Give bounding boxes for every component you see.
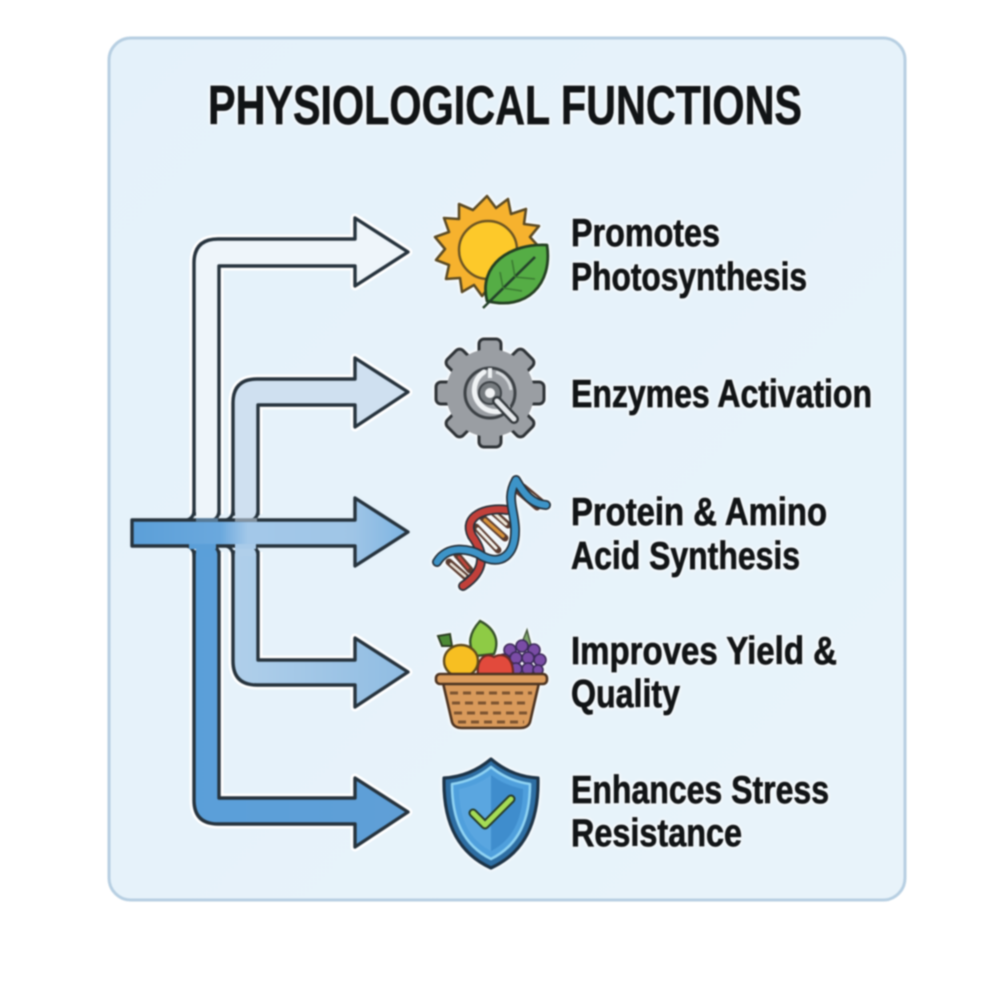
- title: PHYSIOLOGICAL FUNCTIONS: [208, 74, 802, 136]
- arrow: to stress resistance: [187, 544, 408, 847]
- icon: sun with leaf: [435, 196, 548, 308]
- panel: physiological functions background: [109, 38, 905, 900]
- label: protein and amino acid synthesis: Protein & Amino: [571, 491, 827, 534]
- label: improves yield and quality: Quality: [571, 673, 680, 716]
- icon: fruit basket: [436, 621, 547, 728]
- label: improves yield and quality: Improves Yield &: [571, 630, 837, 673]
- label: promotes photosynthesis: [571, 212, 807, 299]
- icon: DNA helix: [437, 480, 546, 586]
- label: enhances stress resistance: Resistance: [571, 812, 742, 855]
- arrow: to yield and quality: [226, 544, 408, 707]
- icon: shield with check: [444, 759, 538, 868]
- icon: gear: [436, 339, 544, 447]
- arrow: main horizontal to protein synthesis: [132, 498, 408, 566]
- arrow: to photosynthesis: [187, 218, 408, 522]
- label: enhances stress resistance: [571, 769, 829, 855]
- label: enzymes activation: Enzymes Activation: [571, 373, 872, 416]
- label: improves yield and quality: [571, 630, 837, 716]
- label: promotes photosynthesis: Promotes: [571, 212, 720, 255]
- arrow: to enzymes: [226, 358, 408, 522]
- label: protein and amino acid synthesis: [571, 491, 827, 578]
- label: protein and amino acid synthesis: Acid Synthesis: [571, 535, 800, 578]
- label: enhances stress resistance: Enhances Stress: [571, 769, 829, 812]
- label: promotes photosynthesis: Photosynthesis: [571, 256, 807, 299]
